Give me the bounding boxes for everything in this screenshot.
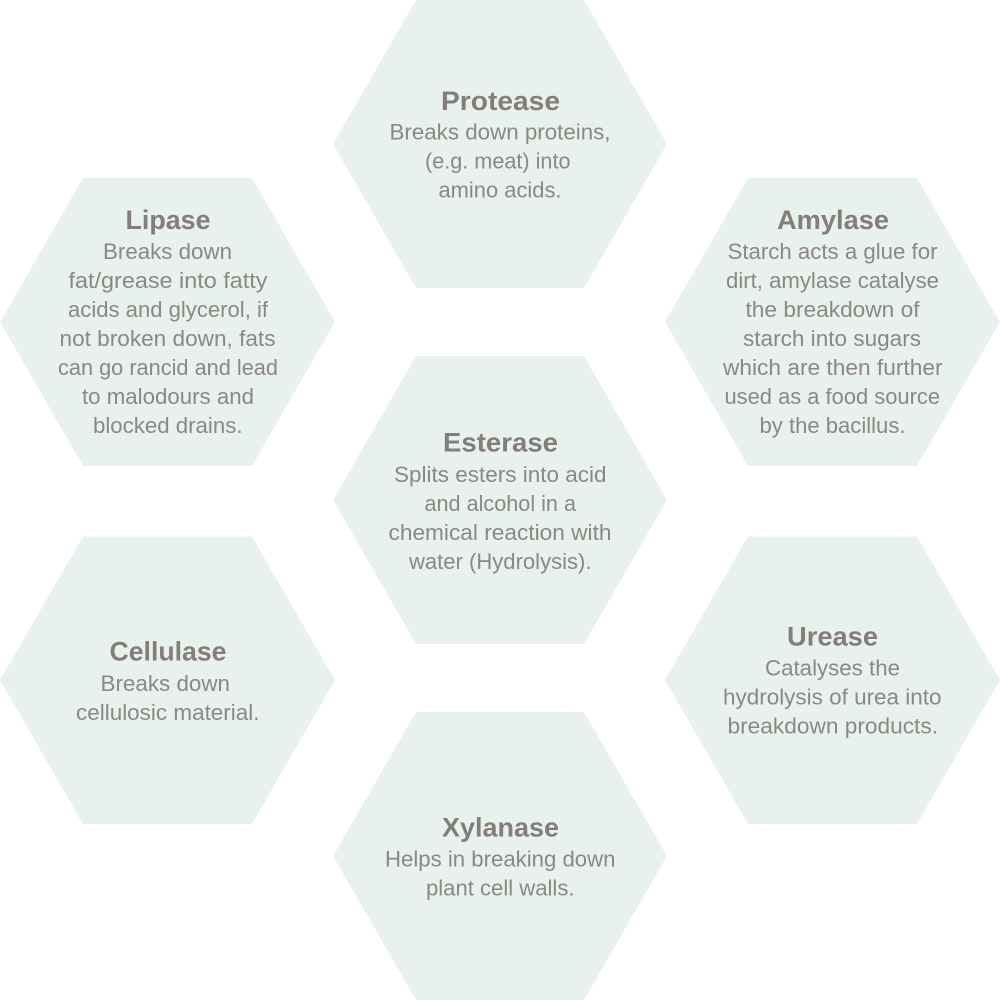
text block: Urease description: Catalyses the: [765, 656, 900, 680]
text block: Esterase description: [388, 462, 612, 574]
panel: Cellulase: [0, 536, 335, 824]
panel: Esterase: [333, 356, 667, 644]
text block: Cellulase description: [76, 671, 260, 725]
text block: Lipase description: blocked drains.: [93, 413, 242, 438]
text block: Urease description: hydrolysis of urea into: [723, 684, 942, 710]
panel: Lipase: [0, 178, 335, 466]
text block: Amylase description: starch into sugars: [743, 326, 921, 351]
text block: Cellulase description: cellulosic material.: [76, 700, 260, 725]
panel: Amylase: [665, 178, 1000, 466]
heading: Amylase: Amylase: [777, 205, 889, 235]
text block: Amylase description: used as a food source: [724, 384, 940, 409]
text block: Amylase description: dirt, amylase catalyse: [726, 268, 939, 293]
text block: Protease description: amino acids.: [438, 178, 562, 202]
panel: Xylanase: [333, 712, 667, 1000]
text block: Amylase description: Starch acts a glue for: [728, 239, 938, 264]
text block: Esterase description: Splits esters into acid: [394, 462, 606, 487]
text block: Lipase description: [58, 239, 278, 438]
text block: Lipase description: fat/grease into fatty: [68, 268, 268, 293]
heading: Lipase: Lipase: [126, 205, 210, 235]
text block: Protease description: (e.g. meat) into: [425, 148, 570, 174]
text block: Lipase description: to malodours and: [82, 384, 254, 409]
panel: Urease: [665, 536, 1000, 824]
text block: Amylase description: the breakdown of: [746, 297, 920, 322]
text block: Esterase description: chemical reaction with: [388, 520, 612, 545]
text block: Xylanase description: Helps in breaking down: [385, 846, 616, 872]
text block: Xylanase description: [385, 846, 616, 900]
heading: Urease: Urease: [787, 622, 878, 652]
text block: Amylase description: which are then further: [722, 355, 942, 380]
text block: Lipase description: not broken down, fats: [60, 326, 276, 351]
heading: Esterase: Esterase: [443, 428, 558, 458]
heading: Protease: Protease: [441, 86, 560, 116]
heading: Xylanase: Xylanase: [442, 812, 559, 842]
text block: Amylase description: by the bacillus.: [760, 413, 906, 438]
heading: Cellulase: Cellulase: [110, 636, 226, 666]
text block: Amylase description: [722, 239, 942, 438]
text block: Urease description: breakdown products.: [728, 714, 938, 738]
text block: Xylanase description: plant cell walls.: [426, 876, 574, 900]
text block: Urease description: [723, 656, 942, 738]
text block: Protease description: [390, 120, 610, 202]
text block: Esterase description: water (Hydrolysis).: [408, 549, 592, 574]
text block: Protease description: Breaks down proteins,: [390, 120, 610, 144]
text block: Lipase description: acids and glycerol, if: [68, 297, 269, 322]
text block: Cellulase description: Breaks down: [100, 671, 230, 696]
text block: Lipase description: can go rancid and lead: [58, 355, 278, 380]
text block: Lipase description: Breaks down: [103, 239, 232, 264]
panel: Protease: [333, 0, 667, 288]
text block: Esterase description: and alcohol in a: [424, 491, 577, 516]
